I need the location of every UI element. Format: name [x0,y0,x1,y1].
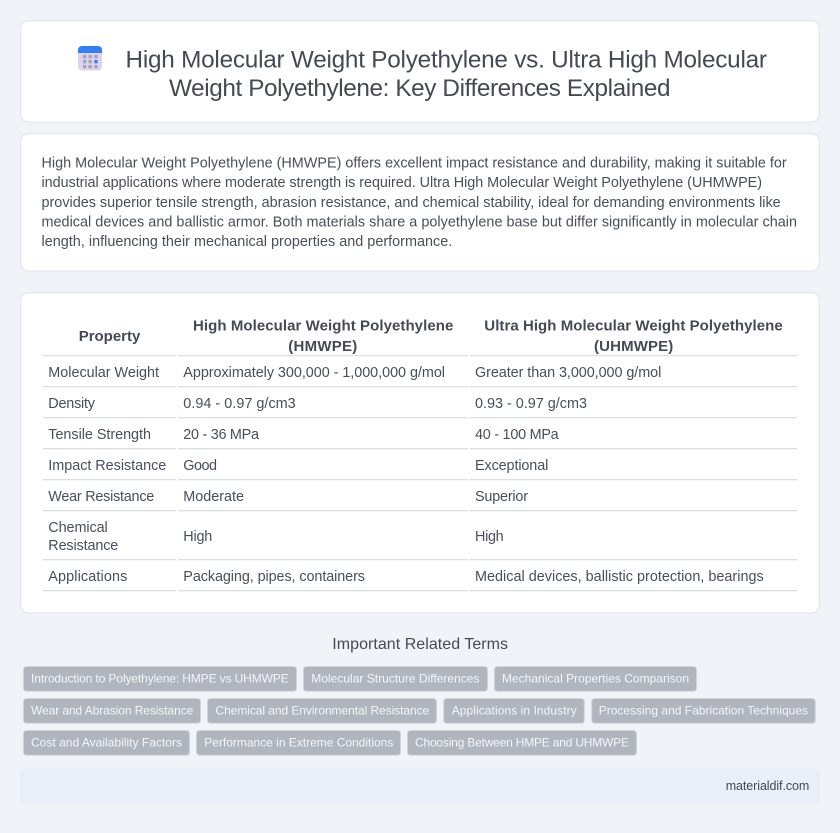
row: wear resistance: Superior [475,489,528,505]
table header row: Ultra High Molecular Weight Polyethylene [484,318,783,335]
row: molecular weight: Approximately 300,000 - 1,000,000 g/mol [183,365,445,381]
row: wear resistance: Wear Resistance [48,489,154,505]
row: chemical resistance: Chemical [48,520,108,536]
row: density: 0.93 - 0.97 g/cm3 [475,396,587,412]
tag: chemical and environmental [208,698,436,723]
tag: molecular structure [304,666,488,691]
row: chemical resistance: High [183,529,212,545]
related terms tags [24,666,815,755]
summary paragraph [42,156,797,250]
table header row [79,318,783,355]
summary paragraph: High Molecular Weight Polyethylene (HMWPE) offers excellent impact resistance and durability, making it suitable for [42,156,787,172]
title: High Molecular Weight Polyethylene vs. Ultra High Molecular [126,46,767,74]
row: molecular weight [48,365,661,381]
row: impact resistance [48,458,548,474]
row: chemical resistance: High [475,529,504,545]
tag: processing and fabrication [592,698,815,723]
tag: processing and fabrication: Processing and Fabrication Techniques [599,704,808,718]
row: applications [48,569,764,585]
table header row: (HMWPE) [288,338,357,355]
row: density [48,396,587,412]
row: applications: Applications [48,569,127,585]
tag: extreme conditions: Performance in Extreme Conditions [204,736,393,750]
summary paragraph: provides superior tensile strength, abrasion resistance, and chemical stability, ideal for demanding environments like [42,195,781,211]
row: chemical resistance: Resistance [48,538,118,554]
title [126,46,767,102]
tag: cost and availability [24,730,190,755]
table header row: High Molecular Weight Polyethylene [193,318,453,335]
summary paragraph: industrial applications where moderate strength is required. Ultra High Molecular Weight Polyethylene (UHMWPE) [42,175,762,191]
row: applications: Medical devices, ballistic protection, bearings [475,569,764,585]
row: impact resistance: Exceptional [475,458,548,474]
tag: choosing between: Choosing Between HMPE and UHMWPE [415,736,629,750]
row: chemical resistance [48,520,504,554]
header panel [21,21,819,122]
tag: choosing between [408,730,636,755]
tag: applications in industry: Applications in Industry [452,704,577,718]
row: tensile strength: Tensile Strength [48,427,151,443]
row: tensile strength: 40 - 100 MPa [475,427,559,443]
title: Weight Polyethylene: Key Differences Explained [169,75,670,102]
table header row: (UHMWPE) [594,338,673,355]
tag: introduction: Introduction to Polyethylene: HMPE vs UHMWPE [31,672,289,686]
row: wear resistance [48,489,528,505]
panel: summary [21,134,819,271]
footer bar [20,769,820,803]
tag: mechanical properties [494,666,696,691]
tag: molecular structure: Molecular Structure Differences [311,672,480,686]
row: applications: Packaging, pipes, containers [183,569,365,585]
row: molecular weight: Greater than 3,000,000 g/mol [475,365,661,381]
tag: wear and abrasion: Wear and Abrasion Resistance [31,704,194,718]
tag: extreme conditions [196,730,400,755]
panel: comparison table [21,293,819,613]
icon: calendar [78,46,102,70]
row: tensile strength: 20 - 36 MPa [183,427,259,443]
summary paragraph: length, influencing their mechanical properties and performance. [42,234,452,250]
tag: introduction [24,666,296,691]
tag: mechanical properties: Mechanical Properties Comparison [502,672,689,686]
row: impact resistance: Good [183,458,217,474]
footer source text: materialdif.com [726,779,809,793]
table header row: Property [79,328,141,345]
row: impact resistance: Impact Resistance [48,458,166,474]
summary paragraph: medical devices and ballistic armor. Both materials share a polyethylene base but differ significantly in molecular chain [42,214,797,230]
row: density: 0.94 - 0.97 g/cm3 [183,396,296,412]
row: molecular weight: Molecular Weight [48,365,159,381]
row: density: Density [48,396,96,412]
tag: chemical and environmental: Chemical and Environmental Resistance [216,704,430,718]
tag: applications in industry [444,698,584,723]
tag: cost and availability: Cost and Availability Factors [31,736,182,750]
tag: wear and abrasion [24,698,200,723]
row: tensile strength [48,427,559,443]
row: wear resistance: Moderate [183,489,244,505]
heading: important related terms: Important Related Terms [332,636,508,653]
